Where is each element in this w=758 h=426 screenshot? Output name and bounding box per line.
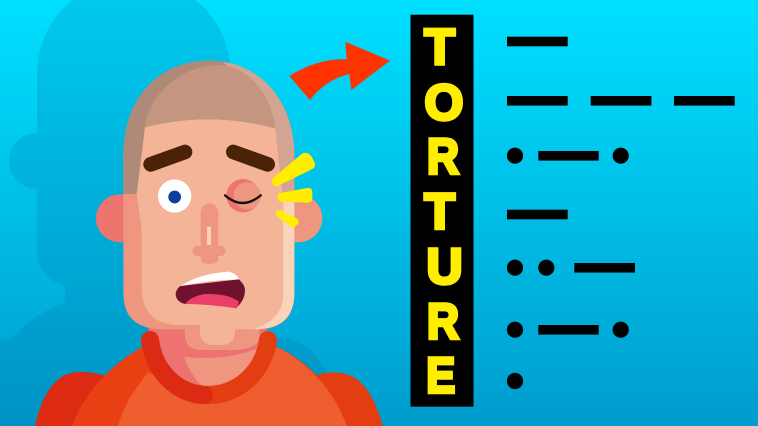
mouth — [176, 272, 245, 308]
bruised eye — [225, 179, 261, 212]
chin — [200, 323, 235, 345]
torso highlight — [118, 347, 347, 426]
open eye — [158, 179, 191, 213]
head base — [123, 61, 294, 329]
morse U — [507, 260, 635, 276]
title letters: R — [427, 293, 459, 349]
character — [35, 61, 383, 426]
right ear — [274, 194, 322, 242]
right eyebrow — [233, 152, 268, 164]
morse O — [507, 96, 735, 106]
neck light area — [184, 348, 259, 386]
title letters: R — [427, 128, 459, 184]
collar — [150, 340, 268, 395]
left eyebrow — [151, 152, 185, 164]
torso — [72, 343, 347, 426]
arrow — [289, 42, 390, 100]
collar dark side — [150, 340, 204, 395]
hair top — [145, 65, 275, 128]
title letters: E — [426, 348, 455, 404]
nose — [192, 203, 226, 264]
left arm — [35, 372, 110, 426]
morse R — [507, 322, 629, 338]
title letters: O — [425, 75, 463, 131]
morse R — [507, 148, 629, 164]
face — [137, 119, 283, 329]
head and neck group — [96, 61, 322, 395]
neck — [149, 327, 267, 395]
title letters — [424, 19, 463, 404]
chin shadow — [185, 327, 259, 350]
face highlight — [253, 197, 294, 329]
title letters: T — [424, 19, 455, 75]
morse code — [507, 37, 735, 389]
title letters: U — [426, 238, 463, 294]
title panel: TORTURE — [410, 15, 474, 407]
morse T — [507, 37, 568, 46]
right arm — [315, 372, 383, 426]
impact rays — [272, 153, 315, 227]
hair right side — [223, 62, 294, 200]
silhouette shadow of figure — [0, 0, 330, 426]
left ear — [96, 194, 144, 242]
morse E — [507, 373, 523, 389]
title letters: T — [424, 183, 455, 239]
hair back — [123, 61, 294, 200]
morse T — [507, 210, 568, 219]
